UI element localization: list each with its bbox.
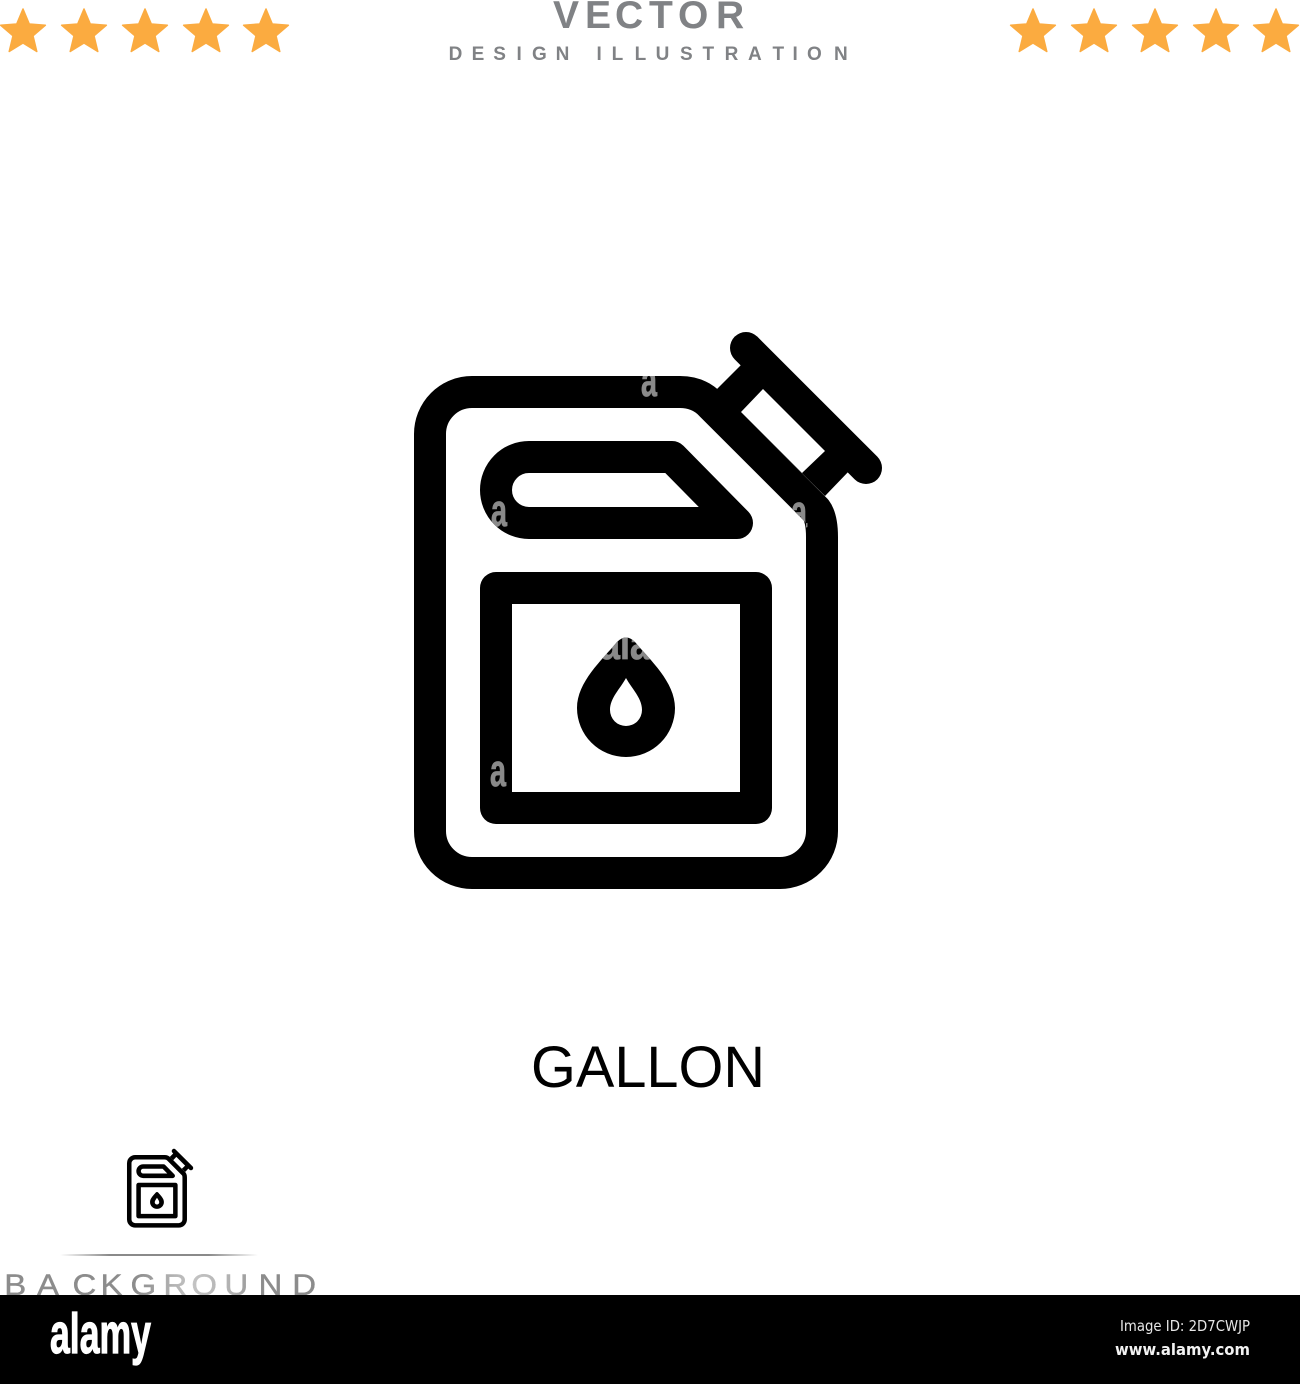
watermark fragments: a <box>791 486 808 537</box>
image id: Image ID: 2D7CWJP <box>1120 1317 1250 1335</box>
canister cap <box>717 348 866 496</box>
label: BACKGROUND: BACKGROUND <box>4 1267 316 1302</box>
subheading: DESIGN ILLUSTRATION: DESIGN ILLUSTRATION <box>449 44 848 65</box>
canister body <box>430 392 822 873</box>
left star rating <box>1 9 288 52</box>
icon: large gallon canister <box>430 348 866 873</box>
watermark fragments <box>490 355 808 796</box>
watermark fragments: a <box>641 355 658 406</box>
canister label <box>496 588 756 808</box>
watermark fragments: a <box>490 745 507 796</box>
icon: oil drop <box>577 638 675 757</box>
right star rating <box>1011 9 1298 52</box>
website: www.alamy.com <box>1115 1340 1250 1359</box>
icon: small gallon canister <box>129 1151 191 1225</box>
footer bar <box>0 1295 1300 1384</box>
canister handle <box>496 457 737 523</box>
title: GALLON: GALLON <box>531 1035 765 1100</box>
watermark fragments: ala <box>600 618 651 669</box>
alamy logo: alamy <box>50 1302 151 1366</box>
watermark fragments: a <box>491 485 508 536</box>
